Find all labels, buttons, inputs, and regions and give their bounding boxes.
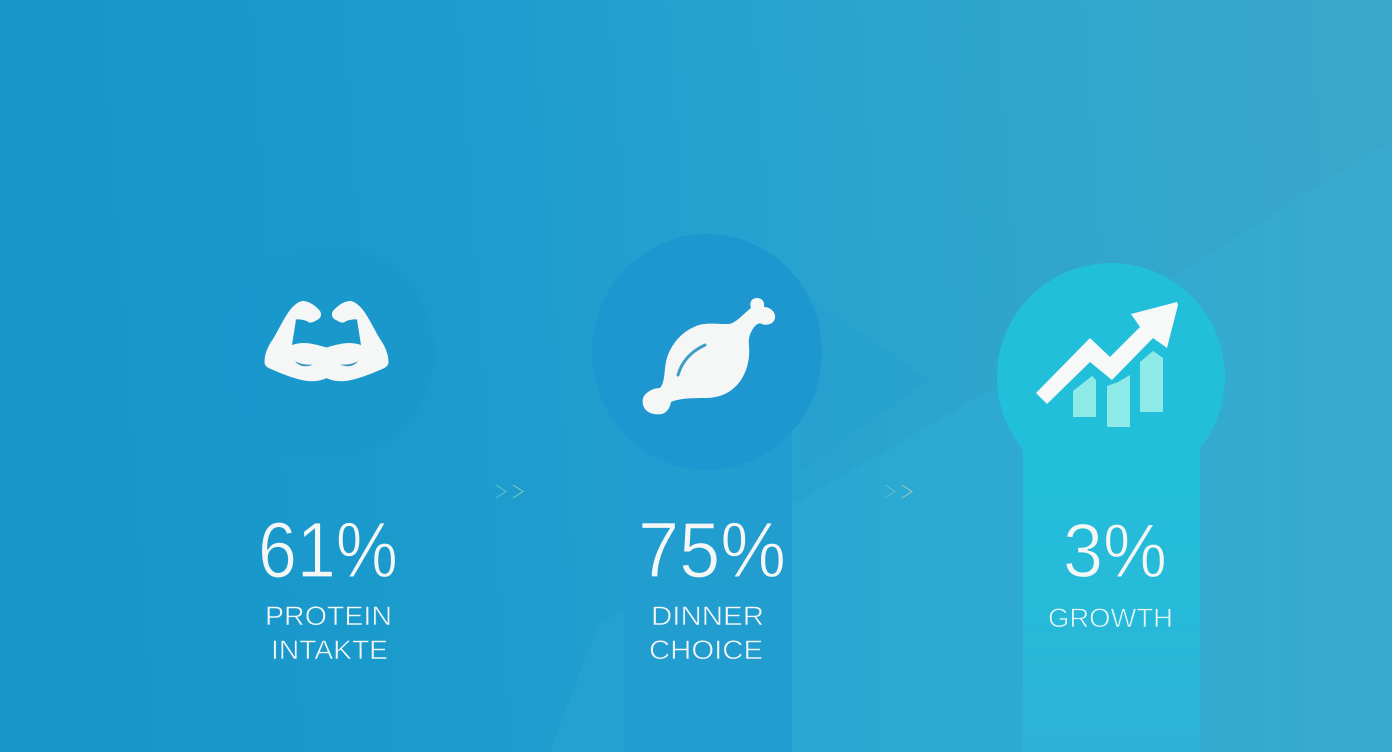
background diagonal shapes xyxy=(550,140,1392,752)
icon: flexed arms xyxy=(264,301,388,381)
icon: growth arrow and bars xyxy=(1036,302,1178,427)
arrow: chevrons 2 xyxy=(885,485,912,498)
panel: protein intake xyxy=(219,244,435,665)
circle: growth xyxy=(997,263,1225,491)
circle: dinner xyxy=(592,234,822,470)
stat: 75%: 75% xyxy=(638,505,786,594)
label: growth: GROWTH xyxy=(1048,603,1173,633)
label: dinner choice: DINNER xyxy=(651,601,764,631)
faint icon circle: protein xyxy=(219,244,435,460)
icon: chicken drumstick xyxy=(643,298,775,414)
arrow: chevrons 1 xyxy=(496,485,523,498)
column: growth xyxy=(1023,440,1200,752)
stat: 3%: 3% xyxy=(1063,509,1167,594)
label: dinner choice: CHOICE xyxy=(649,635,763,665)
stat: 61%: 61% xyxy=(258,505,398,594)
column: dinner xyxy=(624,430,792,752)
label: protein intakte xyxy=(265,601,392,665)
panel: dinner choice xyxy=(592,234,822,752)
label: protein intakte: INTAKTE xyxy=(271,635,388,665)
label: protein intakte: PROTEIN xyxy=(265,601,392,631)
panel: growth xyxy=(997,263,1225,752)
label: dinner choice xyxy=(649,601,764,665)
